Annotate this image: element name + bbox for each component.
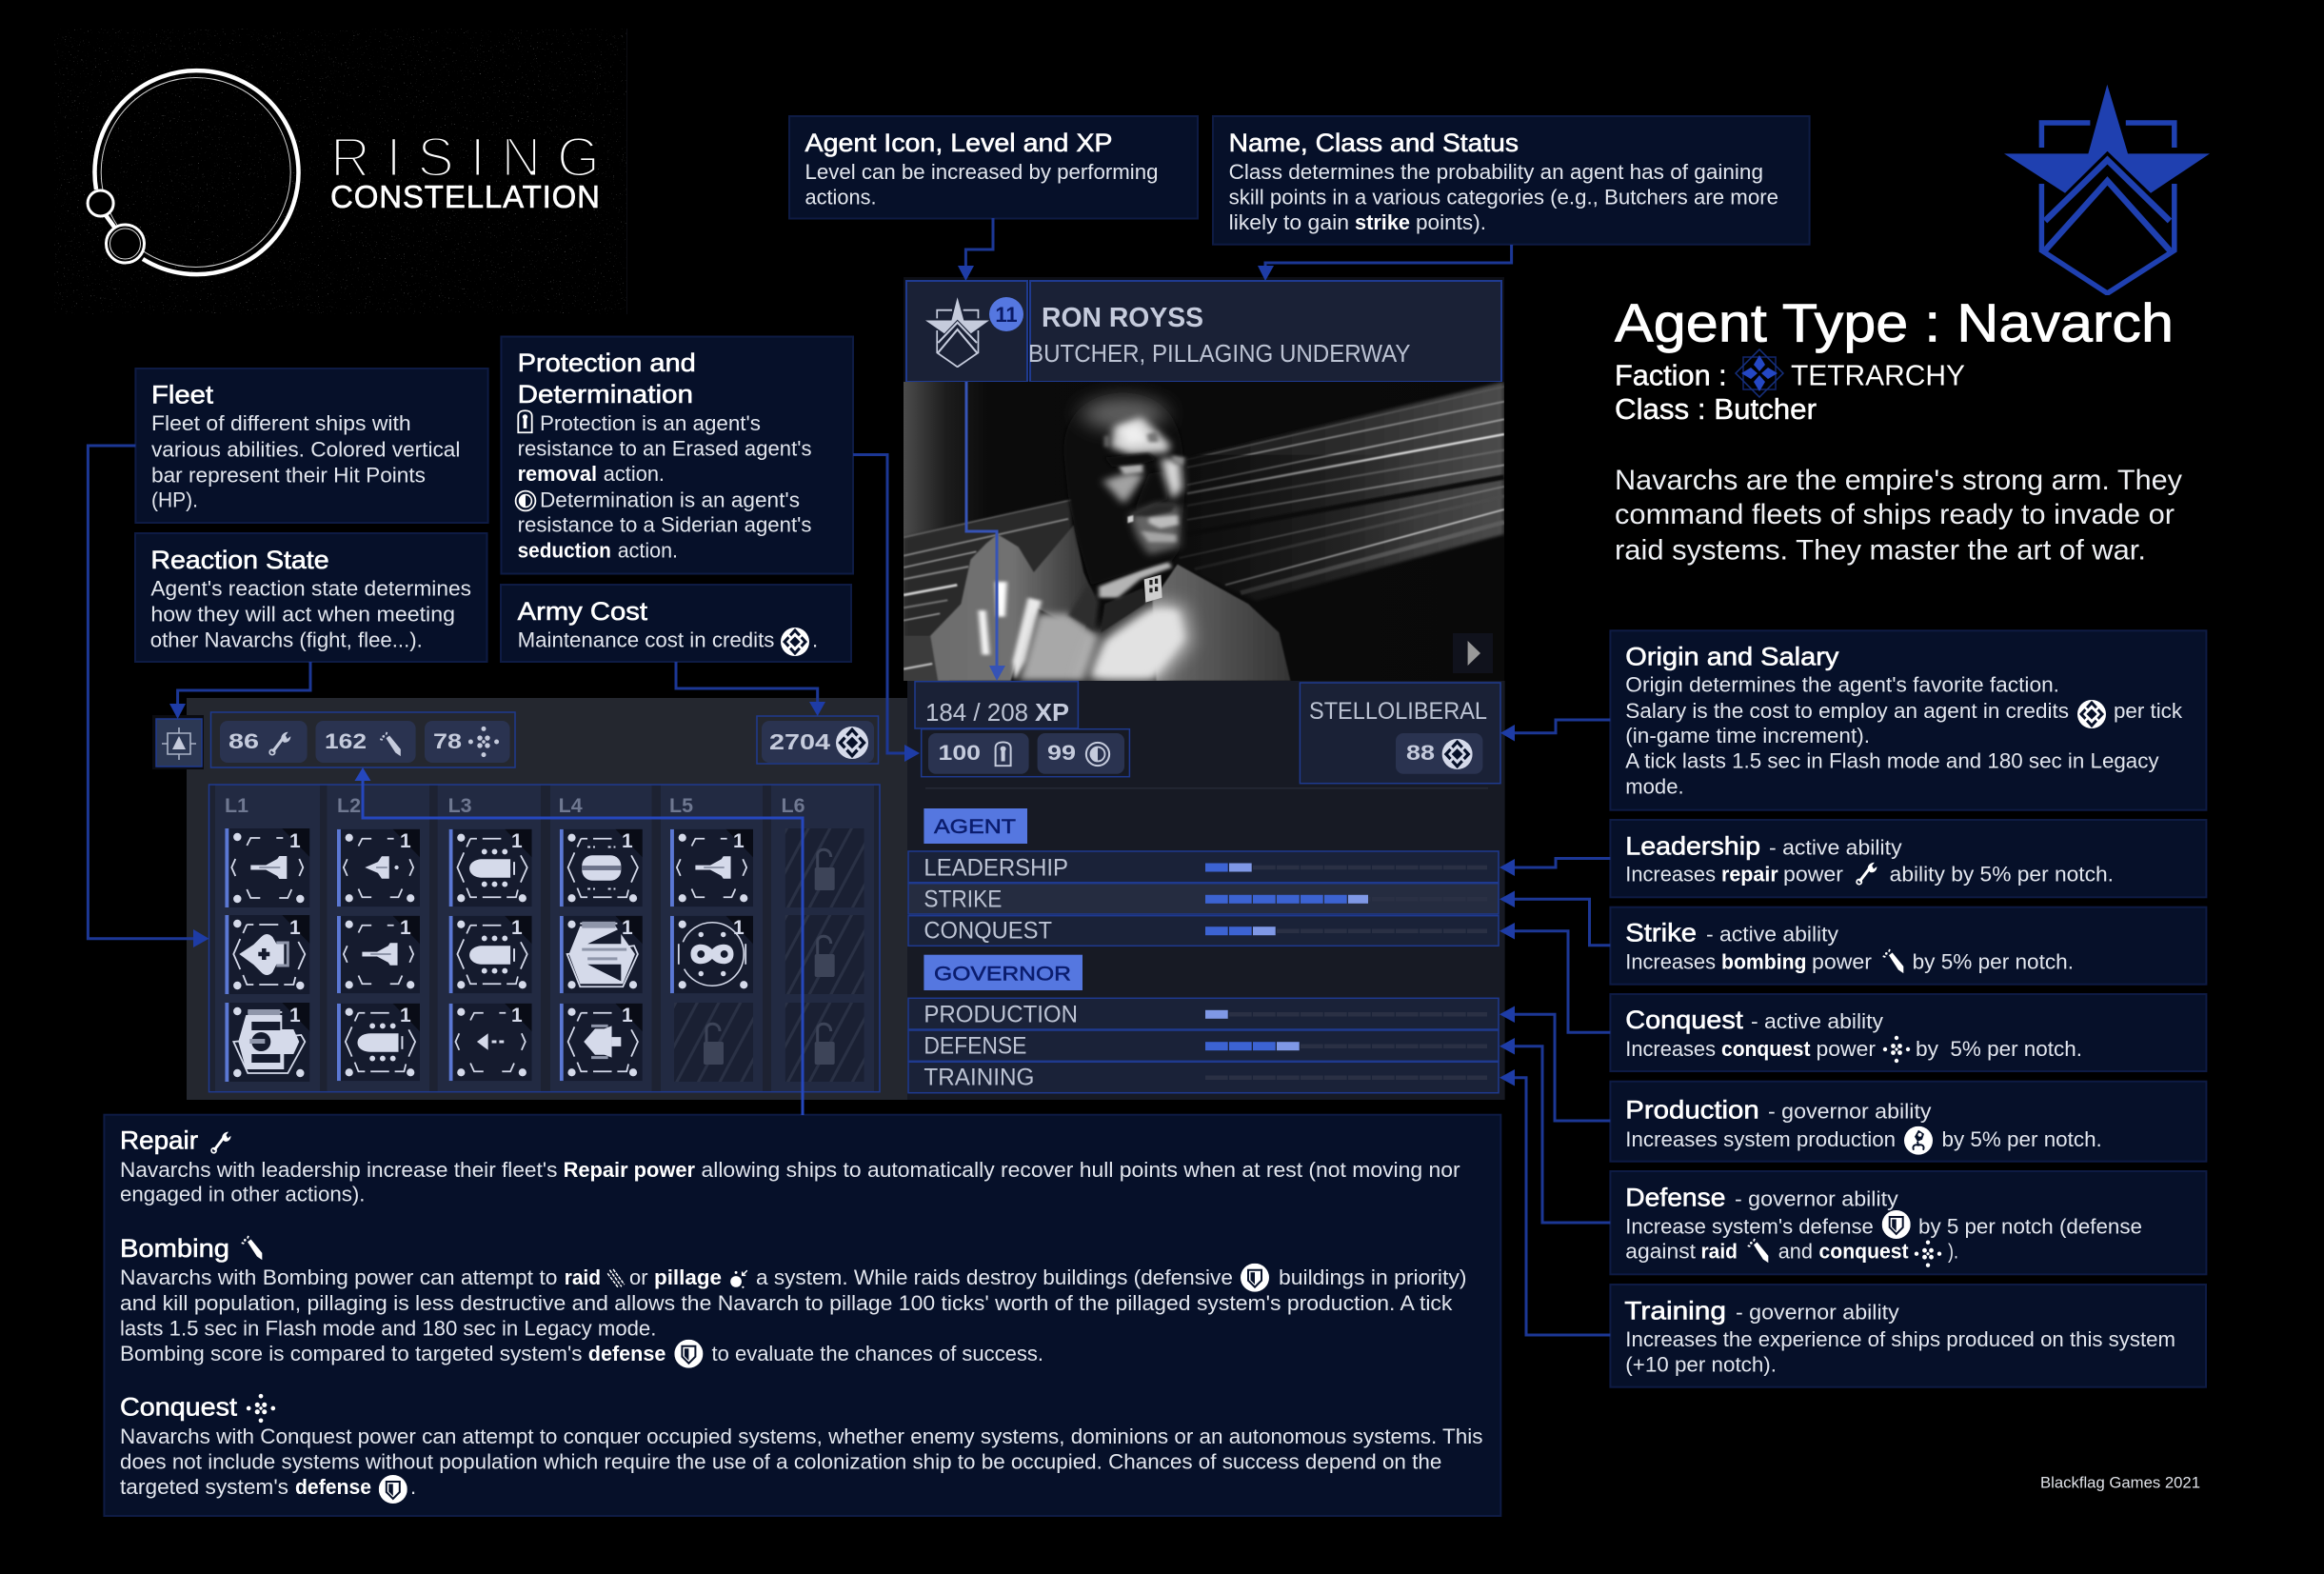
panel: origin and salary note: mode. [1625,774,1684,798]
panel: fleet note: various abilities. Colored vertical [151,437,460,461]
shirt [1019,613,1099,681]
faction and class lines [1615,349,1965,426]
fleet ship grid [209,785,880,1092]
fleet abilities chips: 86 [228,729,259,753]
fleet ship grid: L3 [448,795,472,817]
title: agent type: Agent Type : Navarch [1615,293,2174,354]
panel: conquest note [1610,994,2206,1071]
panel: fleet screen [152,698,907,1100]
panel: army cost note: . [812,628,818,651]
panel: leadership note [1610,820,2206,897]
XP counter: 184 / 208 [925,698,1028,727]
panel: conquest note: power [1817,1037,1876,1061]
panel: agent header [904,277,1504,382]
section: bombing: and kill population, pillaging is less destructive and allows the Navarch to pillage 100 ticks' worth of the pillaged system's production. A tick [120,1291,1453,1315]
panel: protection and determination note: removal [518,462,597,486]
collar and insignia [1099,560,1172,598]
panel: training note: Increases the experience of ships produced on this system [1625,1327,2175,1351]
panel: name, class and status note: points). [1416,210,1486,234]
panel: origin and salary note: (in-game time increment). [1625,724,1870,747]
panel: leadership note: ability by 5% per notch. [1890,863,2114,887]
row 3 ships: 1 [289,1005,301,1026]
row 2 ships: 1 [289,917,301,939]
panel: strike note: power [1812,950,1872,974]
section: repair: engaged in other actions). [120,1183,366,1206]
coat right side [1153,565,1290,681]
section: bombing: lasts 1.5 sec in Flash mode and 180 sec in Legacy mode. [120,1316,656,1340]
panel: origin and salary note: per tick [2114,699,2183,723]
panel: reaction state note: other Navarchs (fight, flee...). [150,628,423,651]
row 2 ships: 1 [400,917,411,939]
panel: name, class and status note: strike [1355,210,1410,234]
panel: leadership note: power [1783,863,1843,887]
panel: conquest note: 5% per notch. [1950,1037,2082,1061]
panel: production note: - governor ability [1768,1100,1931,1124]
section: conquest [120,1393,1483,1504]
XP counter [915,682,1078,728]
row 3 ships: 1 [400,1005,411,1026]
panel: protection and determination note: Protection and [518,349,696,377]
arrow: abilities explanations to fleet abilities [354,767,803,1115]
panel: defense note: ). [1948,1240,1958,1264]
panel: protection and determination note: Determination [518,380,693,408]
panel: conquest note: conquest [1721,1037,1811,1061]
panel: conquest note: - active ability [1751,1009,1883,1033]
fleet abilities chips [211,712,515,767]
panel: reaction state note [135,533,487,662]
panel: fleet note: bar represent their Hit Points [151,463,426,487]
section: bombing: defense [588,1342,665,1365]
panel: protection and determination note: Protection is an agent's [540,411,761,435]
origin and salary block: STELLOLIBERAL [1309,698,1487,725]
stat row: strike: STRIKE [924,887,1002,913]
section: repair: Repair power [564,1158,695,1182]
panel: reaction state note: Agent's reaction state determines [150,576,471,600]
row 1 ships: 1 [400,830,411,852]
panel: leadership note: Increases [1625,863,1716,887]
agent name and status: BUTCHER, PILLAGING UNDERWAY [1028,339,1411,368]
panel: reaction state note: how they will act when meeting [150,602,455,626]
panel: defense note: and [1778,1240,1813,1264]
protection and determination chips [922,729,1129,777]
panel: strike note: Increases [1625,950,1716,974]
badge: governor: GOVERNOR [934,963,1071,985]
logo: Rising Constellation ring and wordmark: RISING [330,127,600,189]
arrow: production note to production row [1500,1006,1610,1121]
panel: origin and salary note: Salary is the cost to employ an agent in credits [1625,699,2069,723]
panel: conquest note: Increases [1625,1037,1716,1061]
panel: production note: by 5% per notch. [1942,1127,2102,1151]
logo: Rising Constellation ring and wordmark: CONSTELLATION [330,179,600,214]
faction and class lines: Faction : [1615,358,1727,391]
row 2 ships: 1 [511,917,523,939]
section: bombing [120,1234,1466,1368]
panel: protection and determination note: Determination is an agent's [540,488,800,512]
section: conquest: . [410,1475,416,1499]
row 2 ships [225,915,864,994]
row 3 ships: 1 [511,1005,523,1026]
section: repair [120,1126,1460,1206]
button: fleet reaction state [152,715,204,769]
section: repair: Repair [120,1126,198,1155]
stat row: defense [908,1030,1499,1061]
agent icon and level: 11 [995,303,1018,327]
panel: army cost note: Army Cost [518,597,648,626]
panel: production note: Production [1625,1096,1759,1125]
agent portrait [904,382,1504,681]
panel: name, class and status note: Name, Class and Status [1229,129,1519,157]
section: bombing: Bombing score is compared to targeted system's [120,1342,583,1365]
row 3 ships [225,1003,864,1082]
section: repair: allowing ships to automatically recover hull points when at rest (not moving nor [701,1158,1460,1182]
panel: agent stats [907,681,1505,1100]
panel: agent icon, level and XP note: Agent Icon, Level and XP [805,129,1112,157]
faction and class lines: TETRARCHY [1791,358,1965,391]
panel: production note [1610,1082,2206,1162]
stat row: leadership [908,851,1499,883]
panel: protection and determination note: action. [618,538,678,562]
panel: army cost note: Maintenance cost in credits [518,628,774,651]
panel: name, class and status note: Class determines the probability an agent has of gaining [1229,160,1763,184]
lit forehead [1110,417,1170,454]
arrow: strike note to strike row [1500,891,1610,946]
arrow: leadership note to leadership row [1500,859,1610,876]
panel: protection and determination note: seduction [518,538,611,562]
row 3 ships: 1 [622,1005,633,1026]
section: conquest: Navarchs with Conquest power can attempt to conquer occupied systems, whether enemy systems, dominions or an autonomous systems. This [120,1425,1483,1448]
stat row: conquest [908,916,1499,946]
arrow: fleet note to ship grid [88,446,209,947]
fleet ship grid: L4 [559,795,583,817]
protection and determination chips: 100 [939,741,981,765]
footer credit: Blackflag Games 2021 [2040,1474,2200,1492]
panel: defense note: conquest [1818,1240,1909,1264]
intro paragraph [1615,465,2182,566]
badge: agent: AGENT [934,816,1016,838]
panel: leadership note: Leadership [1625,831,1760,860]
fleet cost chip [757,716,878,764]
panel: defense note: Increase system's defense [1625,1215,1874,1239]
panel: defense note: against [1625,1240,1696,1264]
badge: governor [924,955,1083,990]
panel: fleet note: (HP). [151,488,198,512]
panel: name, class and status note [1213,116,1810,245]
section: bombing: or [629,1265,647,1289]
brow and socket shadow [1104,453,1157,467]
panel: defense note: raid [1700,1240,1738,1264]
panel: protection and determination note [501,337,853,573]
beard [1129,504,1181,555]
panel: strike note: Strike [1625,918,1697,946]
origin and salary block: 88 [1406,741,1435,765]
panel: reaction state note: Reaction State [150,546,329,574]
logo: starfield background [54,29,627,314]
row 2 ships: 1 [622,917,633,939]
arrow: conquest note to conquest row [1500,923,1610,1032]
arrow: agent icon note to XP [966,382,1005,681]
row 1 ships: 1 [622,830,633,852]
stat row: training [908,1062,1499,1093]
fleet ship grid: L1 [225,795,248,817]
fleet abilities chips: 78 [433,729,462,753]
panel: agent icon, level and XP note [789,116,1198,219]
arrow: training note to training row [1500,1069,1610,1335]
section: repair: Navarchs with leadership increase their fleet's [120,1158,557,1182]
section: bombing: Navarchs with Bombing power can attempt to [120,1265,557,1289]
panel: agent icon, level and XP note: Level can be increased by performing [805,160,1158,184]
panel: strike note [1610,907,2206,985]
fleet abilities chips: 162 [325,729,367,753]
faction and class lines: Class : Butcher [1615,392,1817,426]
arrow: name note to name header [1258,245,1512,281]
row 1 ships: 1 [733,830,745,852]
left drape [930,525,1095,681]
panel: defense note: - governor ability [1735,1187,1898,1211]
origin and salary block [1300,683,1500,784]
row 1 ships: 1 [289,830,301,852]
panel: training note: - governor ability [1736,1300,1899,1324]
stat row: production [908,998,1499,1029]
agent icon and level [906,281,1027,382]
intro paragraph: Navarchs are the empire's strong arm. They [1615,465,2182,496]
panel: army cost note [501,585,851,662]
intro paragraph: raid systems. They master the art of war. [1615,534,2146,566]
panel: origin and salary note [1610,630,2206,810]
panel: fleet note [135,369,488,523]
agent name and status [1028,281,1501,382]
section: bombing: Bombing [120,1234,229,1263]
intro paragraph: command fleets of ships ready to invade or [1615,499,2175,530]
panel: training note: Training [1624,1296,1726,1325]
panel: protection and determination note: action. [604,462,665,486]
section: bombing: a system. While raids destroy buildings (defensive [756,1265,1233,1289]
stat row: conquest: CONQUEST [924,918,1052,945]
panel: protection and determination note: resistance to a Siderian agent's [518,512,811,536]
arrow: origin note to origin block [1500,720,1610,741]
panel: repair, bombing and conquest explanations [104,1115,1500,1516]
panel: fleet note: Fleet [151,380,214,408]
stat row: production: PRODUCTION [924,1001,1078,1027]
fleet ship grid: L5 [669,795,693,817]
panel: production note: Increases system production [1625,1127,1896,1151]
panel: training note [1610,1285,2206,1387]
lit nose [1161,458,1182,500]
stat row: leadership: LEADERSHIP [924,854,1068,881]
arrow: protection note to stats chips [853,455,920,762]
stat row: strike [908,884,1499,914]
lit eye and cheek [1102,472,1145,504]
section: bombing: pillage [654,1265,722,1289]
panel: name, class and status note: skill points in a various categories (e.g., Butchers are more [1229,185,1778,209]
fleet cost chip: 2704 [769,729,830,754]
portrait next button [1453,633,1493,673]
arrow: army cost note to fleet cost [676,662,825,716]
panel: defense note: Defense [1625,1184,1725,1212]
section: bombing: buildings in priority) [1279,1265,1466,1289]
badge: agent [924,808,1027,844]
arrow: agent icon note to agent icon [958,218,993,281]
panel: defense note [1610,1171,2206,1274]
agent name and status: RON ROYSS [1042,303,1203,333]
section: conquest: does not include systems without population which require the use of a colonization ship to be occupied. Chances of success depend on the [120,1449,1441,1473]
panel: conquest note: by [1916,1037,1938,1061]
panel: leadership note: - active ability [1769,835,1902,859]
arrow: reaction note to fleet button [169,662,310,719]
panel: strike note: by 5% per notch. [1913,950,2074,974]
icon: navarch emblem [2004,85,2210,293]
XP counter: XP [1035,698,1069,727]
fleet ship grid: L6 [781,795,805,817]
protection and determination chips: 99 [1047,741,1076,765]
panel: defense note: by 5 per notch (defense [1918,1215,2142,1239]
panel: origin and salary note: Origin and Salary [1625,642,1839,670]
arrow: defense note to defense row [1500,1038,1610,1223]
section: bombing: to evaluate the chances of success. [712,1342,1043,1365]
panel: protection and determination note: resistance to an Erased agent's [518,436,811,461]
panel: leadership note: repair [1721,863,1778,887]
section: conquest: Conquest [120,1393,238,1422]
head silhouette [1066,499,1171,578]
section: conquest: targeted system's [120,1475,288,1499]
panel: name, class and status note: likely to gain [1229,210,1349,234]
panel: origin and salary note: A tick lasts 1.5 sec in Flash mode and 180 sec in Legacy [1625,749,2159,773]
panel: fleet note: Fleet of different ships with [151,411,411,435]
panel: training note: (+10 per notch). [1625,1353,1777,1377]
logo: Rising Constellation ring and wordmark [88,70,600,274]
light streak background [904,382,1504,681]
panel: origin and salary note: Origin determines the agent's favorite faction. [1625,673,2059,697]
section: conquest: defense [295,1475,371,1499]
stat row: defense: DEFENSE [924,1033,1026,1060]
panel: strike note: - active ability [1706,922,1838,946]
panel: conquest note: Conquest [1625,1006,1743,1034]
row 1 ships [225,828,864,907]
fleet ship grid: L2 [337,795,361,817]
panel: strike note: bombing [1721,950,1807,974]
section: bombing: raid [565,1265,601,1289]
stat row: training: TRAINING [924,1064,1034,1090]
panel: agent icon, level and XP note: actions. [805,185,876,209]
row 2 ships: 1 [733,917,745,939]
row 1 ships: 1 [511,830,523,852]
